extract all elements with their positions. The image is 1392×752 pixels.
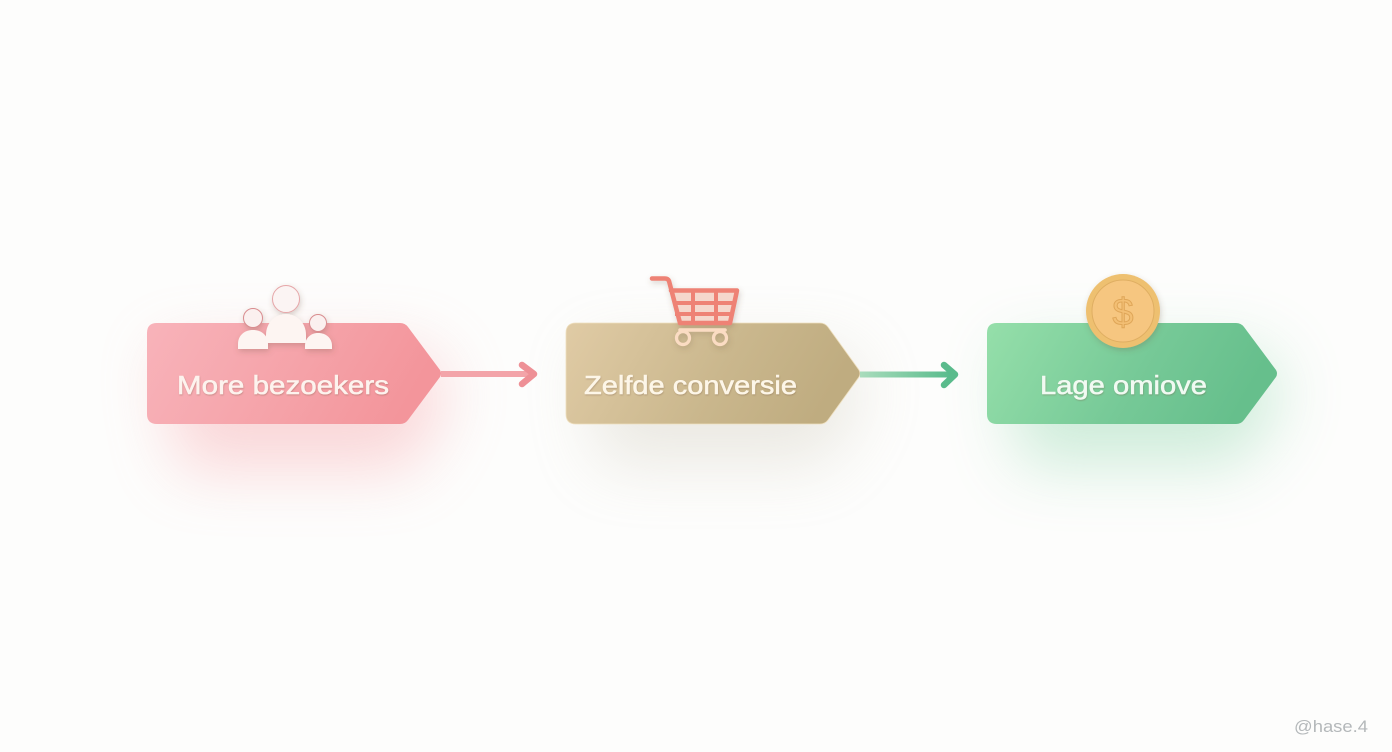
- panel: More bezoekers: [147, 286, 441, 424]
- icon: shopping cart: [652, 278, 737, 344]
- arrow: panel one to panel two: [441, 365, 534, 384]
- shadows under panels: [160, 350, 1285, 470]
- panel: Zelfde conversie: [566, 278, 860, 424]
- icon: people: [238, 286, 332, 349]
- icon: dollar coin: [1086, 274, 1160, 348]
- label: Zelfde conversie: Zelfde conversie: [584, 370, 797, 400]
- label: Lage omiove: Lage omiove: [1040, 370, 1207, 400]
- watermark: @hase.4: [1294, 718, 1368, 736]
- icon: dollar coin: $: [1112, 292, 1134, 334]
- label: More bezoekers: More bezoekers: [177, 370, 389, 400]
- panel: Lage omiove: [987, 274, 1277, 424]
- arrow: panel two to panel three: [860, 365, 955, 385]
